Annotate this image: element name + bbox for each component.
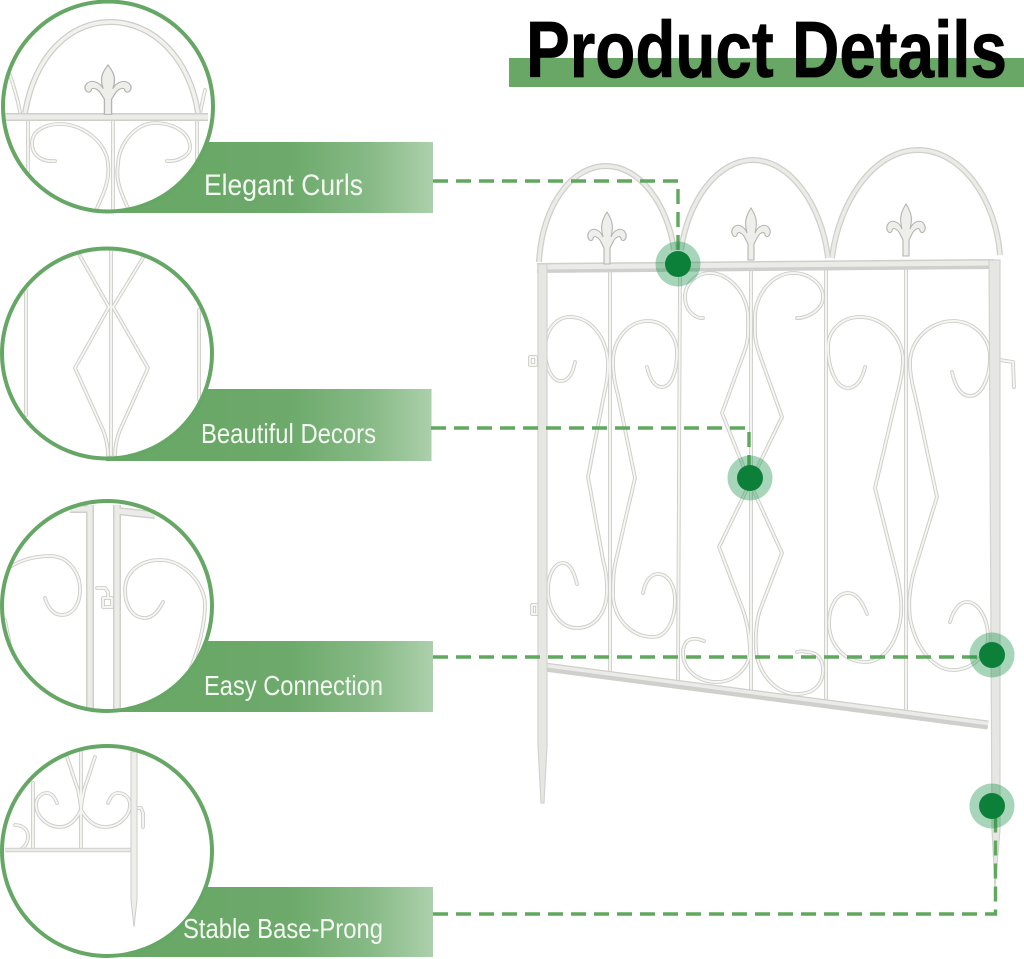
connector: stable base-prong	[433, 806, 996, 914]
banner: easy connection	[107, 641, 433, 712]
zoom circle: stable base-prong	[2, 746, 212, 956]
label: easy connection: Easy Connection	[204, 670, 383, 701]
panel: easy connection	[0, 501, 433, 712]
marker: beautiful decors	[728, 456, 772, 500]
banner: beautiful decors	[106, 389, 432, 461]
zoom circle: easy connection	[0, 501, 212, 711]
banner: stable base-prong	[107, 887, 433, 957]
title underline bar	[509, 58, 1024, 87]
panel: beautiful decors	[2, 248, 432, 461]
marker: elegant curls	[656, 242, 700, 286]
banner: elegant curls	[107, 142, 433, 213]
panel: elegant curls	[3, 2, 433, 213]
connector: elegant curls	[433, 181, 678, 264]
label: elegant curls: Elegant Curls	[204, 169, 363, 202]
zoom circle: beautiful decors	[2, 248, 212, 458]
marker: easy connection	[970, 632, 1014, 678]
connector: beautiful decors	[431, 428, 749, 478]
connector: easy connection	[433, 655, 992, 659]
zoom circle: elegant curls	[3, 2, 213, 212]
marker: stable base-prong	[970, 784, 1014, 828]
label: stable base-prong: Stable Base-Prong	[183, 913, 383, 944]
product photo: white metal fence	[530, 150, 1014, 888]
label: beautiful decors: Beautiful Decors	[201, 418, 376, 449]
title	[509, 5, 1024, 94]
panel: stable base-prong	[2, 746, 433, 957]
